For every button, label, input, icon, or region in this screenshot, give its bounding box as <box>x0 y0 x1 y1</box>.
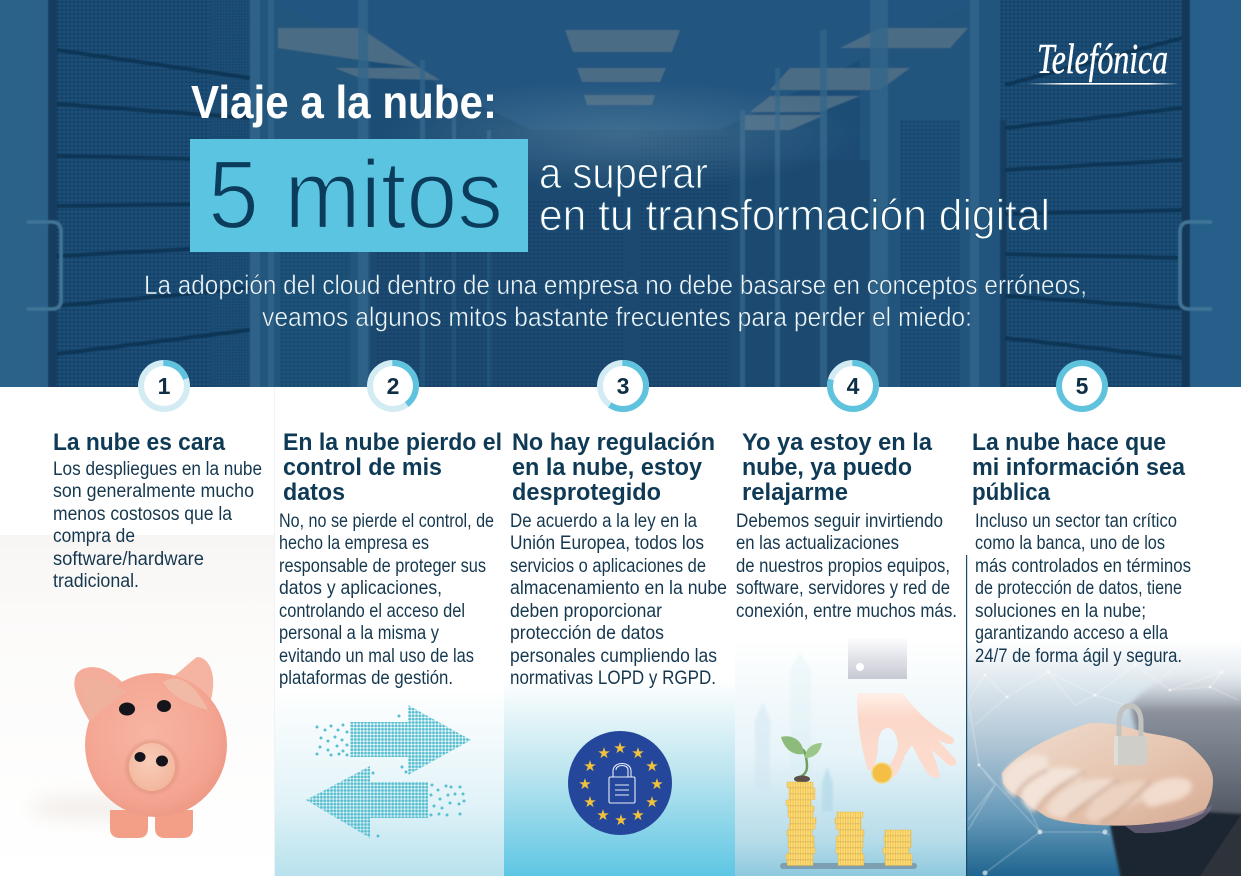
text block: myth 2 <box>279 511 494 689</box>
text block: myth 3: De acuerdo a la ley en la <box>510 511 697 532</box>
icon: EU stars with padlock: ★ <box>645 758 659 775</box>
text block: myth 4 <box>736 511 957 622</box>
icon: seedling <box>781 736 822 782</box>
text block: myth 3: normativas LOPD y RGPD. <box>510 668 716 689</box>
intro text <box>144 270 1087 332</box>
icon: EU stars with padlock: ★ <box>597 745 611 762</box>
panel: column 3, regulacion <box>504 429 735 876</box>
text block: myth 5: como la banca, uno de los <box>975 533 1165 554</box>
intro text: La adopción del cloud dentro de una empresa no debe basarse en conceptos erróneos, <box>144 270 1087 300</box>
text block: myth 4: conexión, entre muchos más. <box>736 601 957 622</box>
text block: myth 2: responsable de proteger sus <box>279 556 486 577</box>
heading: informacion publica: La nube hace que <box>972 429 1166 456</box>
badge: number 4 <box>830 363 876 409</box>
panel: column 2, pierdo el control <box>274 387 504 876</box>
text block: myth 3: servicios o aplicaciones de <box>510 556 706 577</box>
icon: dotted exchange arrows <box>306 705 471 838</box>
badge: number 5 <box>1059 363 1105 409</box>
heading: relajarme: relajarme <box>742 479 848 506</box>
icon: EU stars with padlock: ★ <box>596 807 610 824</box>
text block: myth 2: No, no se pierde el control, de <box>279 511 494 532</box>
text block: myth 5: garantizando acceso a ella <box>975 623 1168 644</box>
icon: EU stars with padlock <box>568 731 672 835</box>
badge: number 1 <box>141 363 187 409</box>
heading: pierdo el control: En la nube pierdo el <box>283 429 502 456</box>
text block: myth 5: de protección de datos, tiene <box>975 578 1182 599</box>
heading: relajarme: nube, ya puedo <box>742 454 912 481</box>
heading: relajarme: Yo ya estoy en la <box>742 429 933 456</box>
text block: myth 1: software/hardware <box>53 549 204 570</box>
subtitle: a superar en tu transformacion digital <box>539 149 1050 240</box>
text block: myth 2: plataformas de gestión. <box>279 668 453 689</box>
text block: myth 4: Debemos seguir invirtiendo <box>736 511 943 532</box>
text block: myth 1: tradicional. <box>53 571 139 592</box>
logo: Telefónica: Telefónica <box>1037 37 1168 83</box>
text block: myth 4: software, servidores y red de <box>736 578 950 599</box>
icon: EU stars with padlock: ★ <box>650 776 664 793</box>
text block: myth 2: personal a la misma y <box>279 623 439 644</box>
heading: informacion publica: mi información sea <box>972 454 1186 481</box>
text block: myth 2: evitando un mal uso de las <box>279 646 474 667</box>
icon: EU stars with padlock: ★ <box>631 745 645 762</box>
panel: column 4, relajarme <box>735 429 966 876</box>
text block: myth 2: controlando el acceso del <box>279 601 465 622</box>
heading: regulacion: en la nube, estoy <box>512 454 703 481</box>
title: Viaje a la nube: Viaje a la nube: <box>191 76 497 128</box>
subtitle: a superar en tu transformacion digital: a superar <box>539 149 708 198</box>
icon: EU stars with padlock: ★ <box>583 758 597 775</box>
icon: hand placing a coin on stacks <box>780 638 956 869</box>
panel: column 5, informacion publica <box>966 429 1241 876</box>
heading: informacion publica: pública <box>972 479 1051 506</box>
text block: myth 3: deben proporcionar <box>510 601 663 622</box>
heading: regulacion <box>512 429 715 506</box>
text block: myth 3 <box>510 511 727 689</box>
icon: faint growth arrows <box>755 652 833 812</box>
callout: 5 mitos box: 5 mitos <box>208 140 503 249</box>
badge: number 4: 4 <box>847 373 860 399</box>
text block: myth 2: hecho la empresa es <box>279 533 429 554</box>
badge: number 2 <box>370 363 416 409</box>
icon: EU stars with padlock: ★ <box>583 794 597 811</box>
heading: la nube es cara: La nube es cara <box>53 429 226 456</box>
heading: regulacion: No hay regulación <box>512 429 715 456</box>
text block: myth 5: soluciones en la nube; <box>975 601 1146 622</box>
icon: padlock <box>1114 706 1147 765</box>
icon: EU stars with padlock: ★ <box>578 776 592 793</box>
text block: myth 5 <box>975 511 1191 667</box>
text block: myth 3: personales cumpliendo las <box>510 646 717 667</box>
text block: myth 5: Incluso un sector tan crítico <box>975 511 1177 532</box>
heading: pierdo el control <box>283 429 502 506</box>
icon: EU stars with padlock: ★ <box>613 740 627 757</box>
icon: piggy bank <box>30 657 227 838</box>
text block: myth 5: 24/7 de forma ágil y segura. <box>975 646 1182 667</box>
heading: regulacion: desprotegido <box>512 479 661 506</box>
icon: EU stars with padlock: ★ <box>645 794 659 811</box>
text block: myth 4: en las actualizaciones <box>736 533 899 554</box>
badge: number 1: 1 <box>158 373 171 399</box>
text block: myth 1: Los despliegues en la nube <box>53 459 262 480</box>
panel: column 1, la nube es cara <box>0 387 274 876</box>
heading: informacion publica <box>972 429 1186 506</box>
text block: myth 3: Unión Europea, todos los <box>510 533 704 554</box>
icon: hand holding padlock over network <box>968 650 1241 876</box>
text block: myth 2: datos y aplicaciones, <box>279 578 442 599</box>
badge: number 3 <box>600 363 646 409</box>
text block: myth 1: menos costosos que la <box>53 504 232 525</box>
icon: EU stars with padlock: ★ <box>614 812 628 829</box>
heading: pierdo el control: control de mis <box>283 454 442 481</box>
icon: EU stars with padlock: ★ <box>631 807 645 824</box>
text block: myth 1 <box>53 459 262 592</box>
text block: myth 1: compra de <box>53 526 135 547</box>
text block: myth 5: más controlados en términos <box>975 556 1191 577</box>
badge: number 3: 3 <box>617 373 629 399</box>
badge: number 5: 5 <box>1076 373 1089 399</box>
text block: myth 3: almacenamiento en la nube <box>510 578 727 599</box>
badge: number 2: 2 <box>387 373 399 399</box>
subtitle: a superar en tu transformacion digital: en tu transformación digital <box>539 191 1050 240</box>
text block: myth 1: son generalmente mucho <box>53 481 254 502</box>
panel: header background, data center corridor <box>0 0 1241 397</box>
text block: myth 4: de nuestros propios equipos, <box>736 556 950 577</box>
heading: pierdo el control: datos <box>283 479 345 506</box>
intro text: veamos algunos mitos bastante frecuentes para perder el miedo: <box>262 302 972 332</box>
heading: relajarme <box>742 429 933 506</box>
text block: myth 3: protección de datos <box>510 623 664 644</box>
